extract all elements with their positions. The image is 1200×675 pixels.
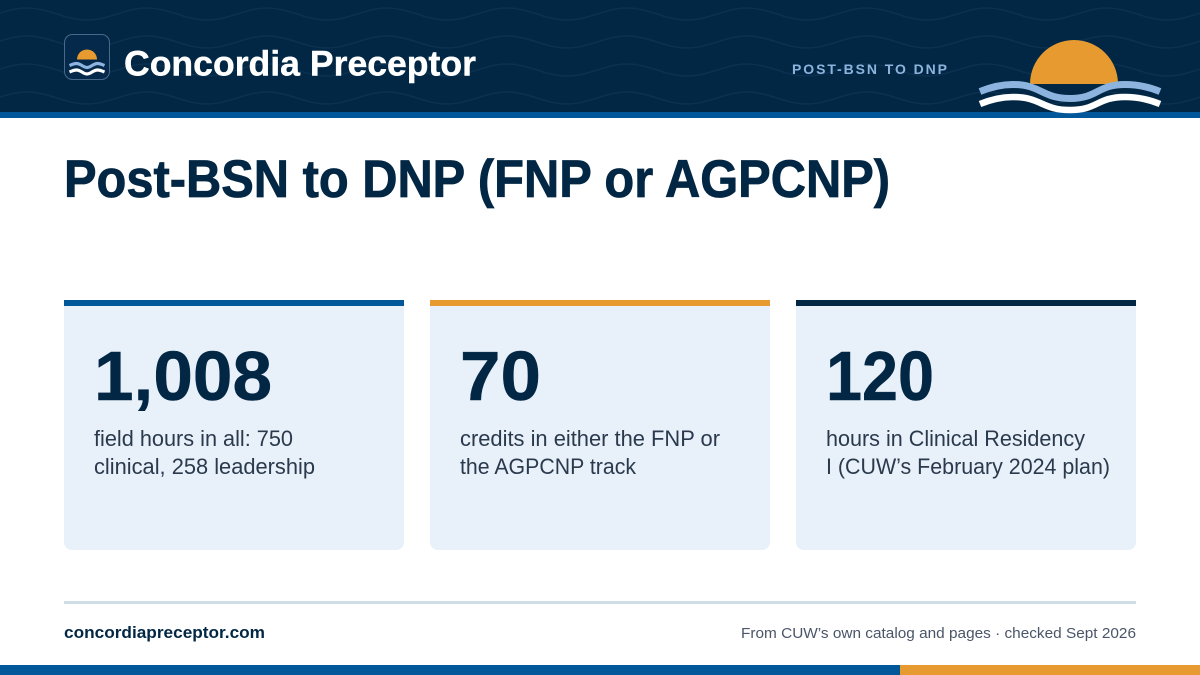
description: credits [460,426,720,479]
description: residency [826,426,1110,479]
stat: 1,008: 1,008 [94,337,272,415]
description: credits: credits in either the FNP or [460,426,720,451]
icon: logo badge [64,34,110,80]
panel: credits [430,300,770,550]
description: residency: hours in Clinical Residency [826,426,1085,451]
description: field hours [94,426,315,479]
title: Post-BSN to DNP (FNP or AGPCNP) [64,150,890,209]
brand name: Concordia Preceptor [124,44,476,84]
panel: residency hours [796,300,1136,550]
footer source note: From CUW’s own catalog and pages · checked Sept 2026 [741,625,1136,642]
stat: 70: 70 [460,337,541,415]
program label: POST-BSN TO DNP [792,61,947,77]
description: field hours: field hours in all: 750 [94,426,293,451]
footer website: concordiapreceptor.com [64,623,265,642]
header band [0,0,1200,118]
description: credits: the AGPCNP track [460,454,637,479]
panel: field hours [64,300,404,550]
description: residency: I (CUW’s February 2024 plan) [826,454,1110,479]
footer colour bar [0,665,1200,675]
stat: 120: 120 [826,337,934,415]
icon: sun over waves [980,40,1160,110]
description: field hours: clinical, 258 leadership [94,454,315,479]
